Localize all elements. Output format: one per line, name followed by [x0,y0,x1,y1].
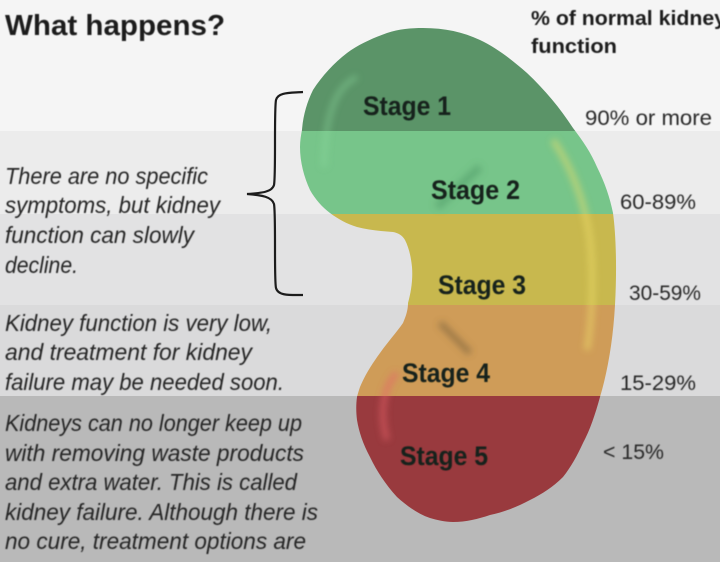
text: stage 4 description: Kidney function is very low, [5,310,272,336]
text: stage 4 description: failure may be needed soon. [5,369,284,395]
bracket [247,92,303,295]
percentage labels: 15-29% [620,372,696,395]
percentage labels [585,107,712,464]
stage labels: Stage 2 [431,175,520,205]
stage labels [363,91,526,471]
text: stage 5 description: and extra water. This is called [5,469,298,495]
stage labels: Stage 4 [402,358,490,388]
text: stages 1 to 3 description [5,163,221,278]
text: stage 4 description [5,310,284,395]
percentage labels: 90% or more [585,107,712,130]
text: stages 1 to 3 description: symptoms, but kidney [5,192,221,218]
kidney highlights [324,77,592,440]
text: stage 5 description: no cure, treatment options are [5,528,306,554]
column header: percent of normal kidney function: % of normal kidney [531,7,720,30]
stage labels: Stage 3 [438,270,526,300]
stage labels: Stage 5 [400,441,488,471]
text: stages 1 to 3 description: There are no specific [5,163,208,189]
kidney diagram [290,20,630,531]
text: stage 5 description: Kidneys can no longer keep up [5,410,302,436]
stage 4 band [357,305,615,396]
column header: percent of normal kidney function: function [531,35,617,58]
text: stage 5 description: with removing waste products [5,440,304,466]
text: stages 1 to 3 description: function can slowly [5,222,195,248]
text: stages 1 to 3 description: decline. [5,252,78,278]
stage 5 band [356,396,600,522]
percentage labels: 30-59% [629,282,701,305]
stage 2 band [290,131,630,214]
title: What happens? [5,10,225,42]
stage labels: Stage 1 [363,91,451,121]
column header: percent of normal kidney function [531,7,720,58]
text: stage 5 description: kidney failure. Although there is [5,499,318,525]
stage 3 band [332,214,616,305]
percentage labels: < 15% [603,441,664,464]
stage 1 band [302,28,576,131]
text: stage 4 description: and treatment for kidney [5,339,253,365]
percentage labels: 60-89% [620,191,696,214]
text: stage 5 description [5,410,318,554]
